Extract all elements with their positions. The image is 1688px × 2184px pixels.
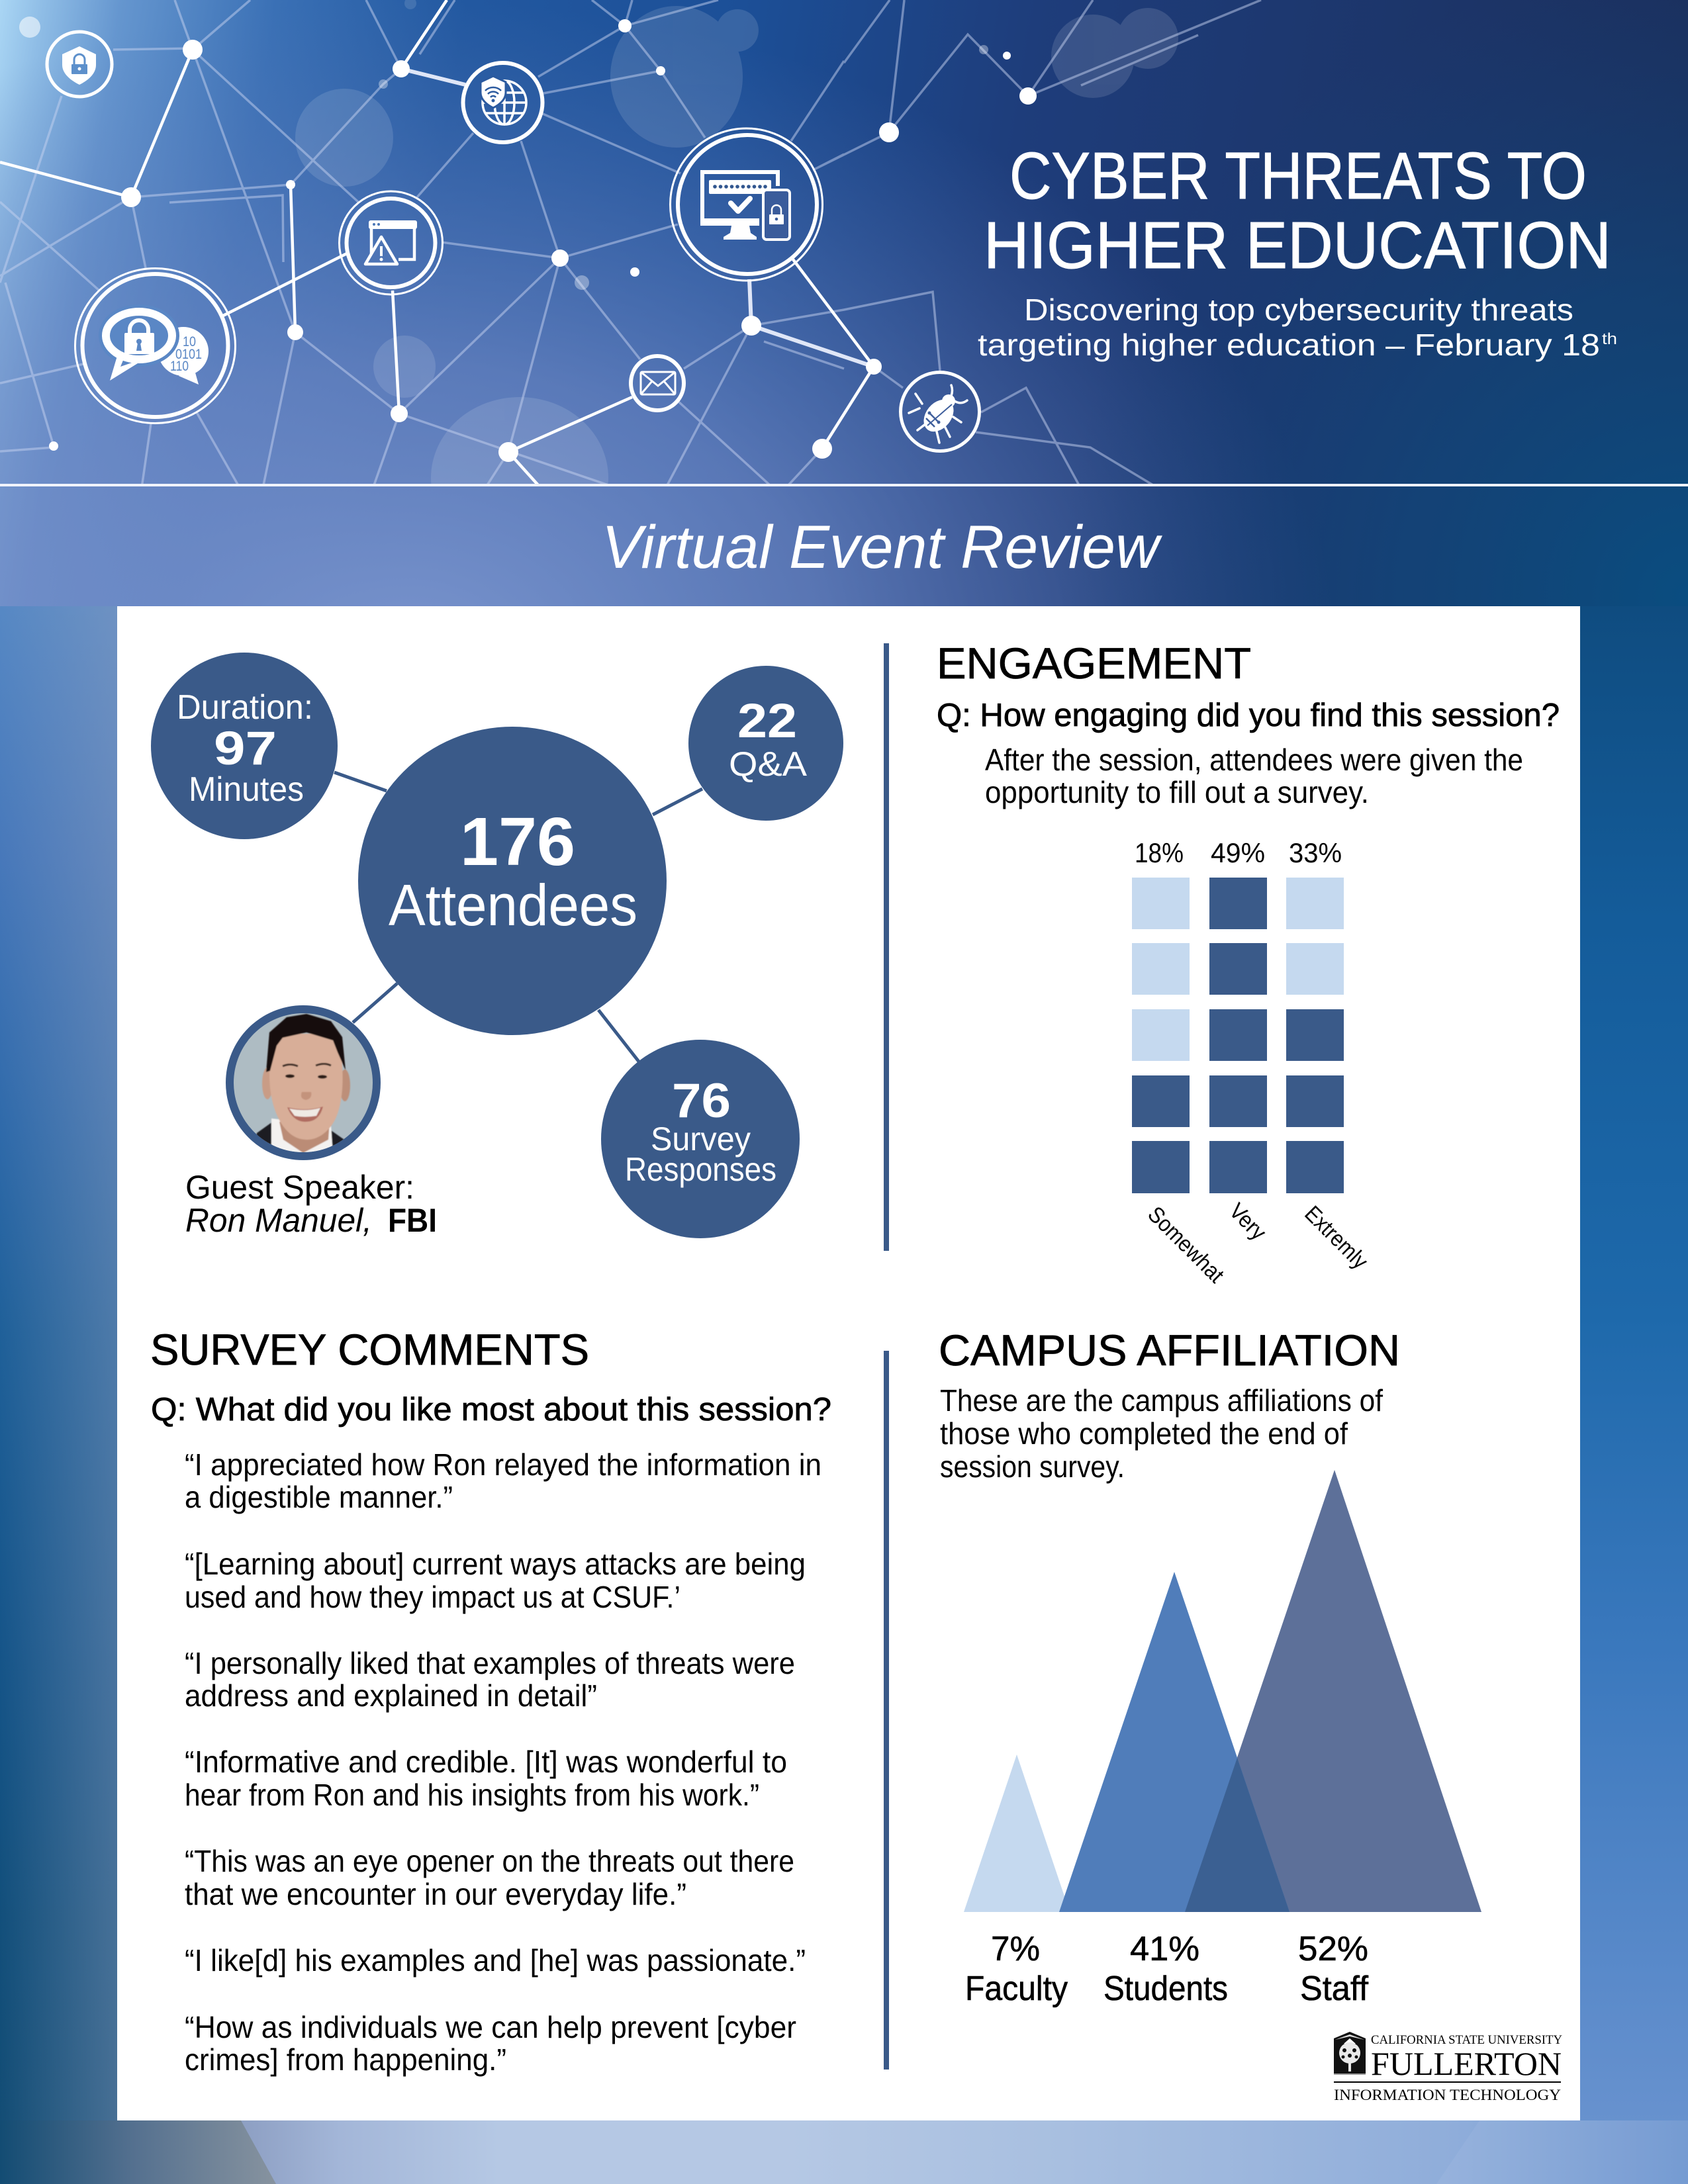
- panel: campus affiliation: [939, 1326, 1481, 2008]
- comment quotes: [185, 1447, 821, 2077]
- waffle chart axis labels: Extremly: [1299, 1201, 1373, 1274]
- icon: shield with padlock: [47, 32, 112, 97]
- bubble: survey responses: [601, 1040, 800, 1238]
- comment quotes: used and how they impact us at CSUF.’: [185, 1580, 680, 1614]
- engagement heading: ENGAGEMENT: [937, 639, 1251, 688]
- icon: encrypted chat bubbles: 110: [170, 359, 189, 374]
- connector lines: [334, 772, 702, 1062]
- bubble: Q&A: Q&A: [729, 745, 807, 784]
- waffle chart percentages: 18%: [1135, 837, 1184, 868]
- logo wordmark: CALIFORNIA STATE UNIVERSITY: [1371, 2033, 1562, 2047]
- bubble: survey responses: Responses: [625, 1151, 776, 1188]
- triangle chart labels: Staff: [1300, 1970, 1369, 2008]
- comment quotes: hear from Ron and his insights from his work.”: [185, 1778, 759, 1812]
- triangle chart labels: 7%: [991, 1930, 1040, 1968]
- title: HIGHER EDUCATION: [984, 208, 1611, 283]
- subtitle: [978, 293, 1617, 362]
- bubble: attendees: 176: [460, 803, 575, 880]
- header network illustration: [0, 0, 1262, 484]
- panel: engagement: [937, 639, 1560, 1288]
- waffle chart axis labels: Very: [1224, 1199, 1271, 1245]
- icon: encrypted chat bubbles: 10: [183, 334, 196, 349]
- comment quotes: that we encounter in our everyday life.”: [185, 1877, 686, 1911]
- icon: globe with wifi shield: [463, 63, 543, 142]
- campus affiliation description: those who completed the end of: [940, 1416, 1348, 1451]
- bubble: duration: [151, 653, 338, 839]
- engagement question: Q: How engaging did you find this session?: [937, 698, 1560, 733]
- triangle chart: [964, 1470, 1481, 1912]
- triangle chart labels: [965, 1930, 1369, 2008]
- logo wordmark: INFORMATION TECHNOLOGY: [1334, 2087, 1561, 2103]
- comment quotes: “How as individuals we can help prevent [cyber: [185, 2010, 796, 2044]
- icon: circuit bug: [900, 372, 980, 451]
- bubble: survey responses: Survey: [651, 1120, 751, 1158]
- bubble: Q&A: [688, 666, 843, 821]
- campus affiliation description: These are the campus affiliations of: [940, 1383, 1383, 1418]
- comment quotes: a digestible manner.”: [185, 1480, 453, 1514]
- comment quotes: “This was an eye opener on the threats out there: [185, 1844, 794, 1878]
- comment quotes: “I appreciated how Ron relayed the information in: [185, 1447, 821, 1482]
- survey comments question: Q: What did you like most about this session?: [151, 1392, 831, 1428]
- triangle chart labels: 41%: [1130, 1930, 1199, 1968]
- waffle chart axis labels: [1143, 1199, 1373, 1288]
- panel: event statistics: [151, 653, 843, 1239]
- comment quotes: “I personally liked that examples of threats were: [185, 1646, 795, 1680]
- bright network lines: [0, 0, 874, 485]
- header divider line: [0, 484, 1688, 486]
- bubble: duration: Minutes: [189, 770, 304, 809]
- icon: envelope: [631, 356, 684, 410]
- translucent background circles: [295, 0, 1178, 484]
- faint network lines: [0, 0, 1261, 488]
- triangle chart labels: Faculty: [965, 1970, 1068, 2008]
- guest speaker caption: Guest Speaker:: [185, 1169, 414, 1206]
- icon: encrypted chat bubbles: [75, 269, 236, 424]
- panel: survey comments: [150, 1325, 831, 2077]
- subtitle: th: [1602, 330, 1617, 348]
- divider: engagement: [884, 643, 889, 1251]
- bubble: duration: Duration:: [177, 688, 313, 727]
- bubble: survey responses: 76: [672, 1074, 731, 1128]
- engagement description: After the session, attendees were given the: [985, 743, 1523, 777]
- comment quotes: crimes] from happening.”: [185, 2042, 506, 2077]
- waffle chart squares: [1132, 878, 1344, 1193]
- comment quotes: “I like[d] his examples and [he] was passionate.”: [185, 1943, 806, 1978]
- network nodes: [19, 17, 1037, 462]
- comment quotes: “[Learning about] current ways attacks are being: [185, 1547, 806, 1581]
- comment quotes: address and explained in detail”: [185, 1678, 597, 1713]
- icon: monitor and phone security: [670, 128, 822, 281]
- logo wordmark: [1334, 2033, 1562, 2103]
- waffle chart axis labels: Somewhat: [1143, 1202, 1229, 1288]
- campus affiliation heading: CAMPUS AFFILIATION: [939, 1326, 1400, 1375]
- title: [984, 139, 1611, 283]
- logo: CSU Fullerton Information Technology: [1334, 2032, 1562, 2103]
- triangle chart labels: Students: [1103, 1970, 1228, 2008]
- guest speaker caption: [185, 1169, 437, 1239]
- comment quotes: “Informative and credible. [It] was wonderful to: [185, 1745, 787, 1779]
- bubble: attendees: Attendees: [389, 872, 637, 938]
- logo emblem: [1334, 2032, 1366, 2075]
- bubble: attendees: [358, 727, 667, 1035]
- subtitle: Discovering top cybersecurity threats: [1024, 293, 1573, 327]
- survey comments heading: SURVEY COMMENTS: [150, 1325, 589, 1374]
- divider: campus affiliation: [884, 1351, 889, 2070]
- waffle chart percentages: 49%: [1211, 837, 1265, 868]
- white content panel: [117, 606, 1580, 2120]
- guest speaker caption: Ron Manuel,: [185, 1202, 372, 1239]
- campus affiliation description: session survey.: [940, 1449, 1125, 1484]
- guest speaker caption: FBI: [388, 1202, 437, 1239]
- logo wordmark: FULLERTON: [1371, 2045, 1562, 2082]
- engagement description: [985, 743, 1523, 809]
- waffle chart percentages: [1135, 837, 1342, 868]
- icon: encrypted chat bubbles: 0101: [175, 347, 202, 362]
- triangle chart labels: 52%: [1298, 1930, 1368, 1968]
- bubble: duration: 97: [214, 723, 277, 775]
- guest speaker portrait: [225, 1005, 384, 1165]
- icon: browser window warning: [339, 191, 442, 295]
- waffle chart percentages: 33%: [1289, 837, 1342, 868]
- title: CYBER THREATS TO: [1009, 139, 1587, 213]
- section heading: Virtual Event Review: Virtual Event Review: [602, 514, 1163, 581]
- campus affiliation description: [940, 1383, 1383, 1484]
- engagement description: opportunity to fill out a survey.: [985, 775, 1369, 809]
- subtitle: targeting higher education – February 18: [978, 328, 1600, 362]
- bubble: Q&A: 22: [737, 694, 797, 748]
